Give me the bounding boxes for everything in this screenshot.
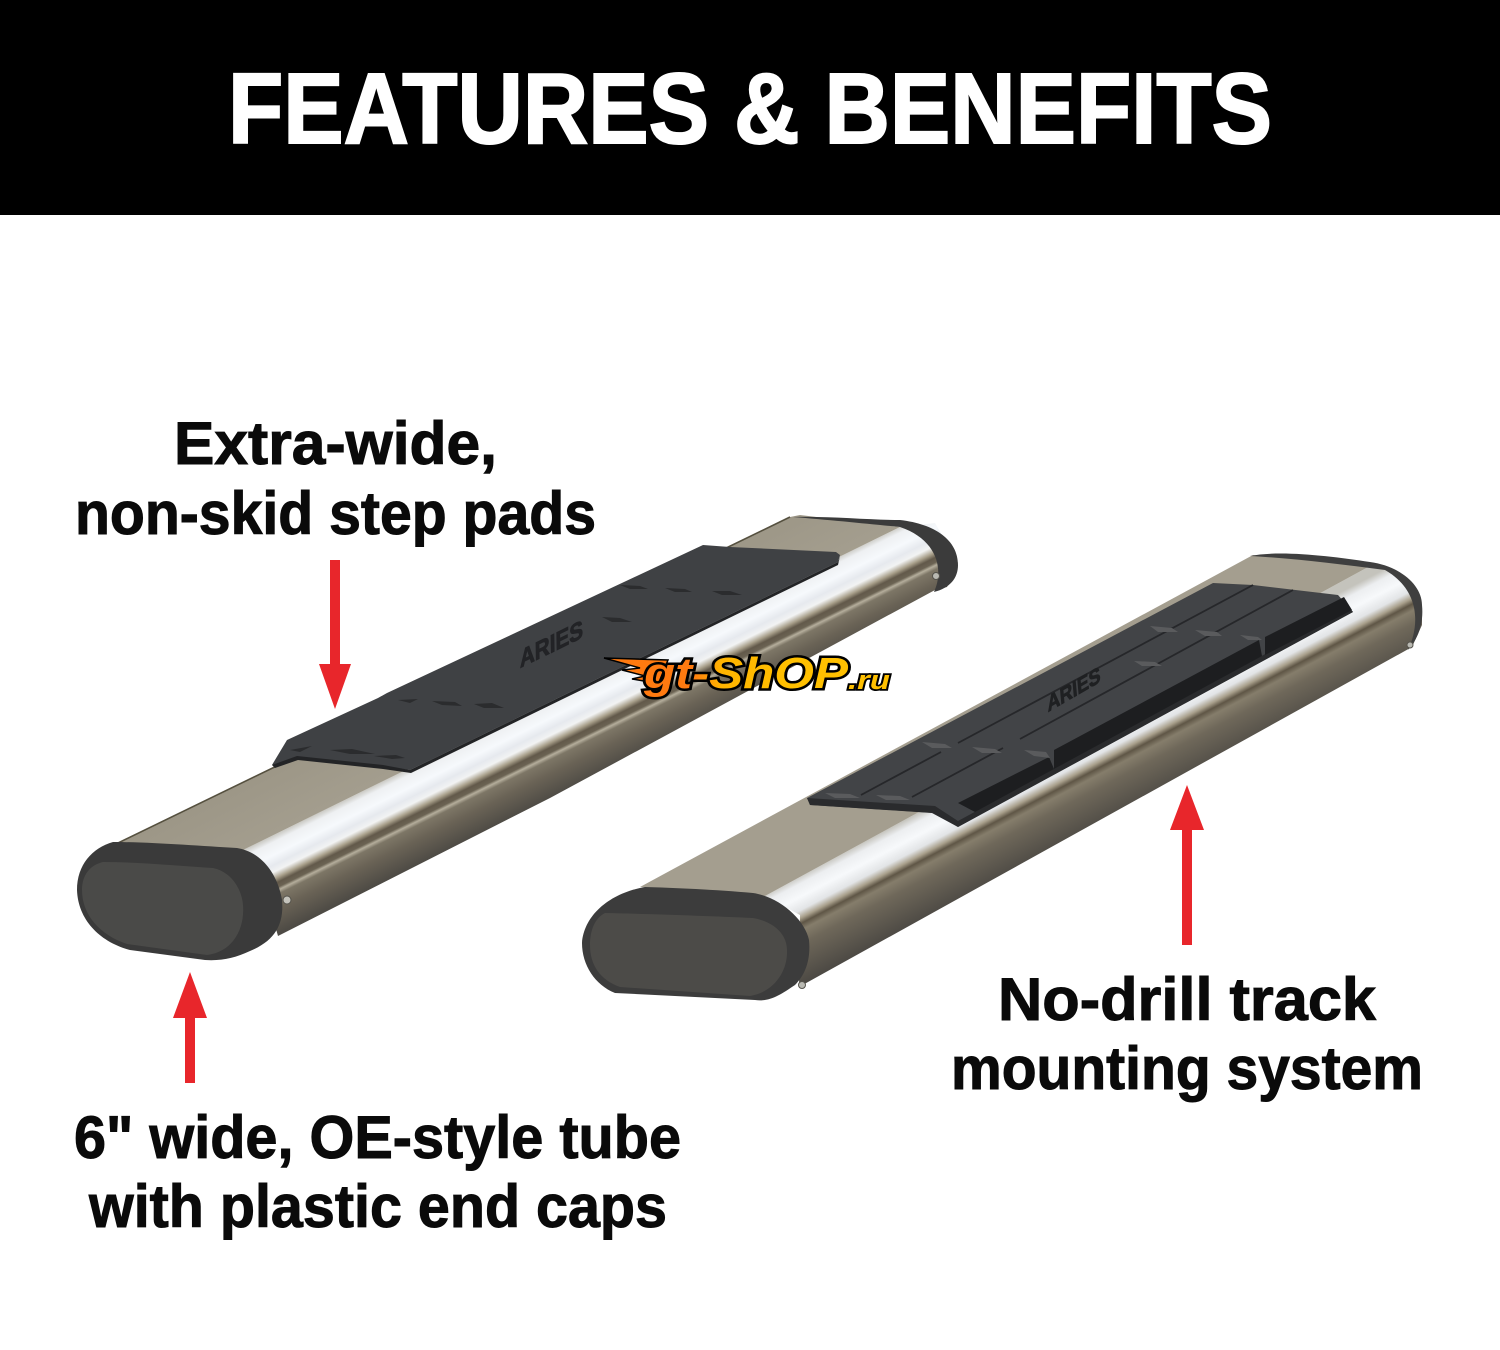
right rail tube body: [765, 566, 1422, 987]
arrow: to step pads: [319, 560, 351, 709]
left rail top surface: [118, 515, 900, 850]
logo domain: .ru: [848, 665, 891, 695]
left step pad: [272, 545, 840, 773]
callout: mounting label: No-drill track: [998, 966, 1377, 1033]
right near screw: [798, 982, 806, 988]
left pad logo: ARIES: [520, 615, 583, 674]
right pad logo: ARIES: [1046, 663, 1101, 717]
right step pad: [807, 583, 1353, 827]
callout: mounting label: mounting system: [951, 1035, 1423, 1102]
right rail far end cap: [1250, 554, 1422, 650]
right rail top surface: [640, 555, 1370, 896]
left rail tube body: [243, 523, 958, 936]
callout: step pads label: non-skid step pads: [75, 480, 596, 547]
left far screw: [932, 572, 940, 580]
watermark logo: [604, 649, 891, 698]
left end cap: [77, 842, 282, 960]
header banner: [0, 0, 1500, 215]
left near screw: [283, 896, 291, 904]
right far screw: [1407, 642, 1413, 648]
left running board: [77, 515, 958, 960]
right pad ridges: [861, 585, 1293, 797]
logo flame: [604, 658, 668, 692]
right pad tread marks: [825, 626, 1262, 800]
callout: mounting label: [951, 966, 1423, 1102]
right running board: [582, 554, 1422, 1000]
left rail far end cap: [793, 517, 958, 592]
callout: tube label: with plastic end caps: [88, 1173, 667, 1240]
title: FEATURES & BENEFITS: [228, 53, 1272, 165]
callout: tube label: 6" wide, OE-style tube: [74, 1104, 681, 1171]
left pad tread marks: [290, 585, 742, 759]
callout: tube label: [74, 1104, 681, 1240]
right pad dark raised bands: [958, 597, 1352, 812]
callout: step pads label: [75, 410, 596, 547]
callout: step pads label: Extra-wide,: [174, 410, 497, 477]
logo text: gt-ShOP: [643, 649, 849, 698]
arrow: to mounting system: [1170, 785, 1204, 945]
right end cap: [582, 887, 809, 1000]
arrow: to end cap: [173, 972, 207, 1083]
